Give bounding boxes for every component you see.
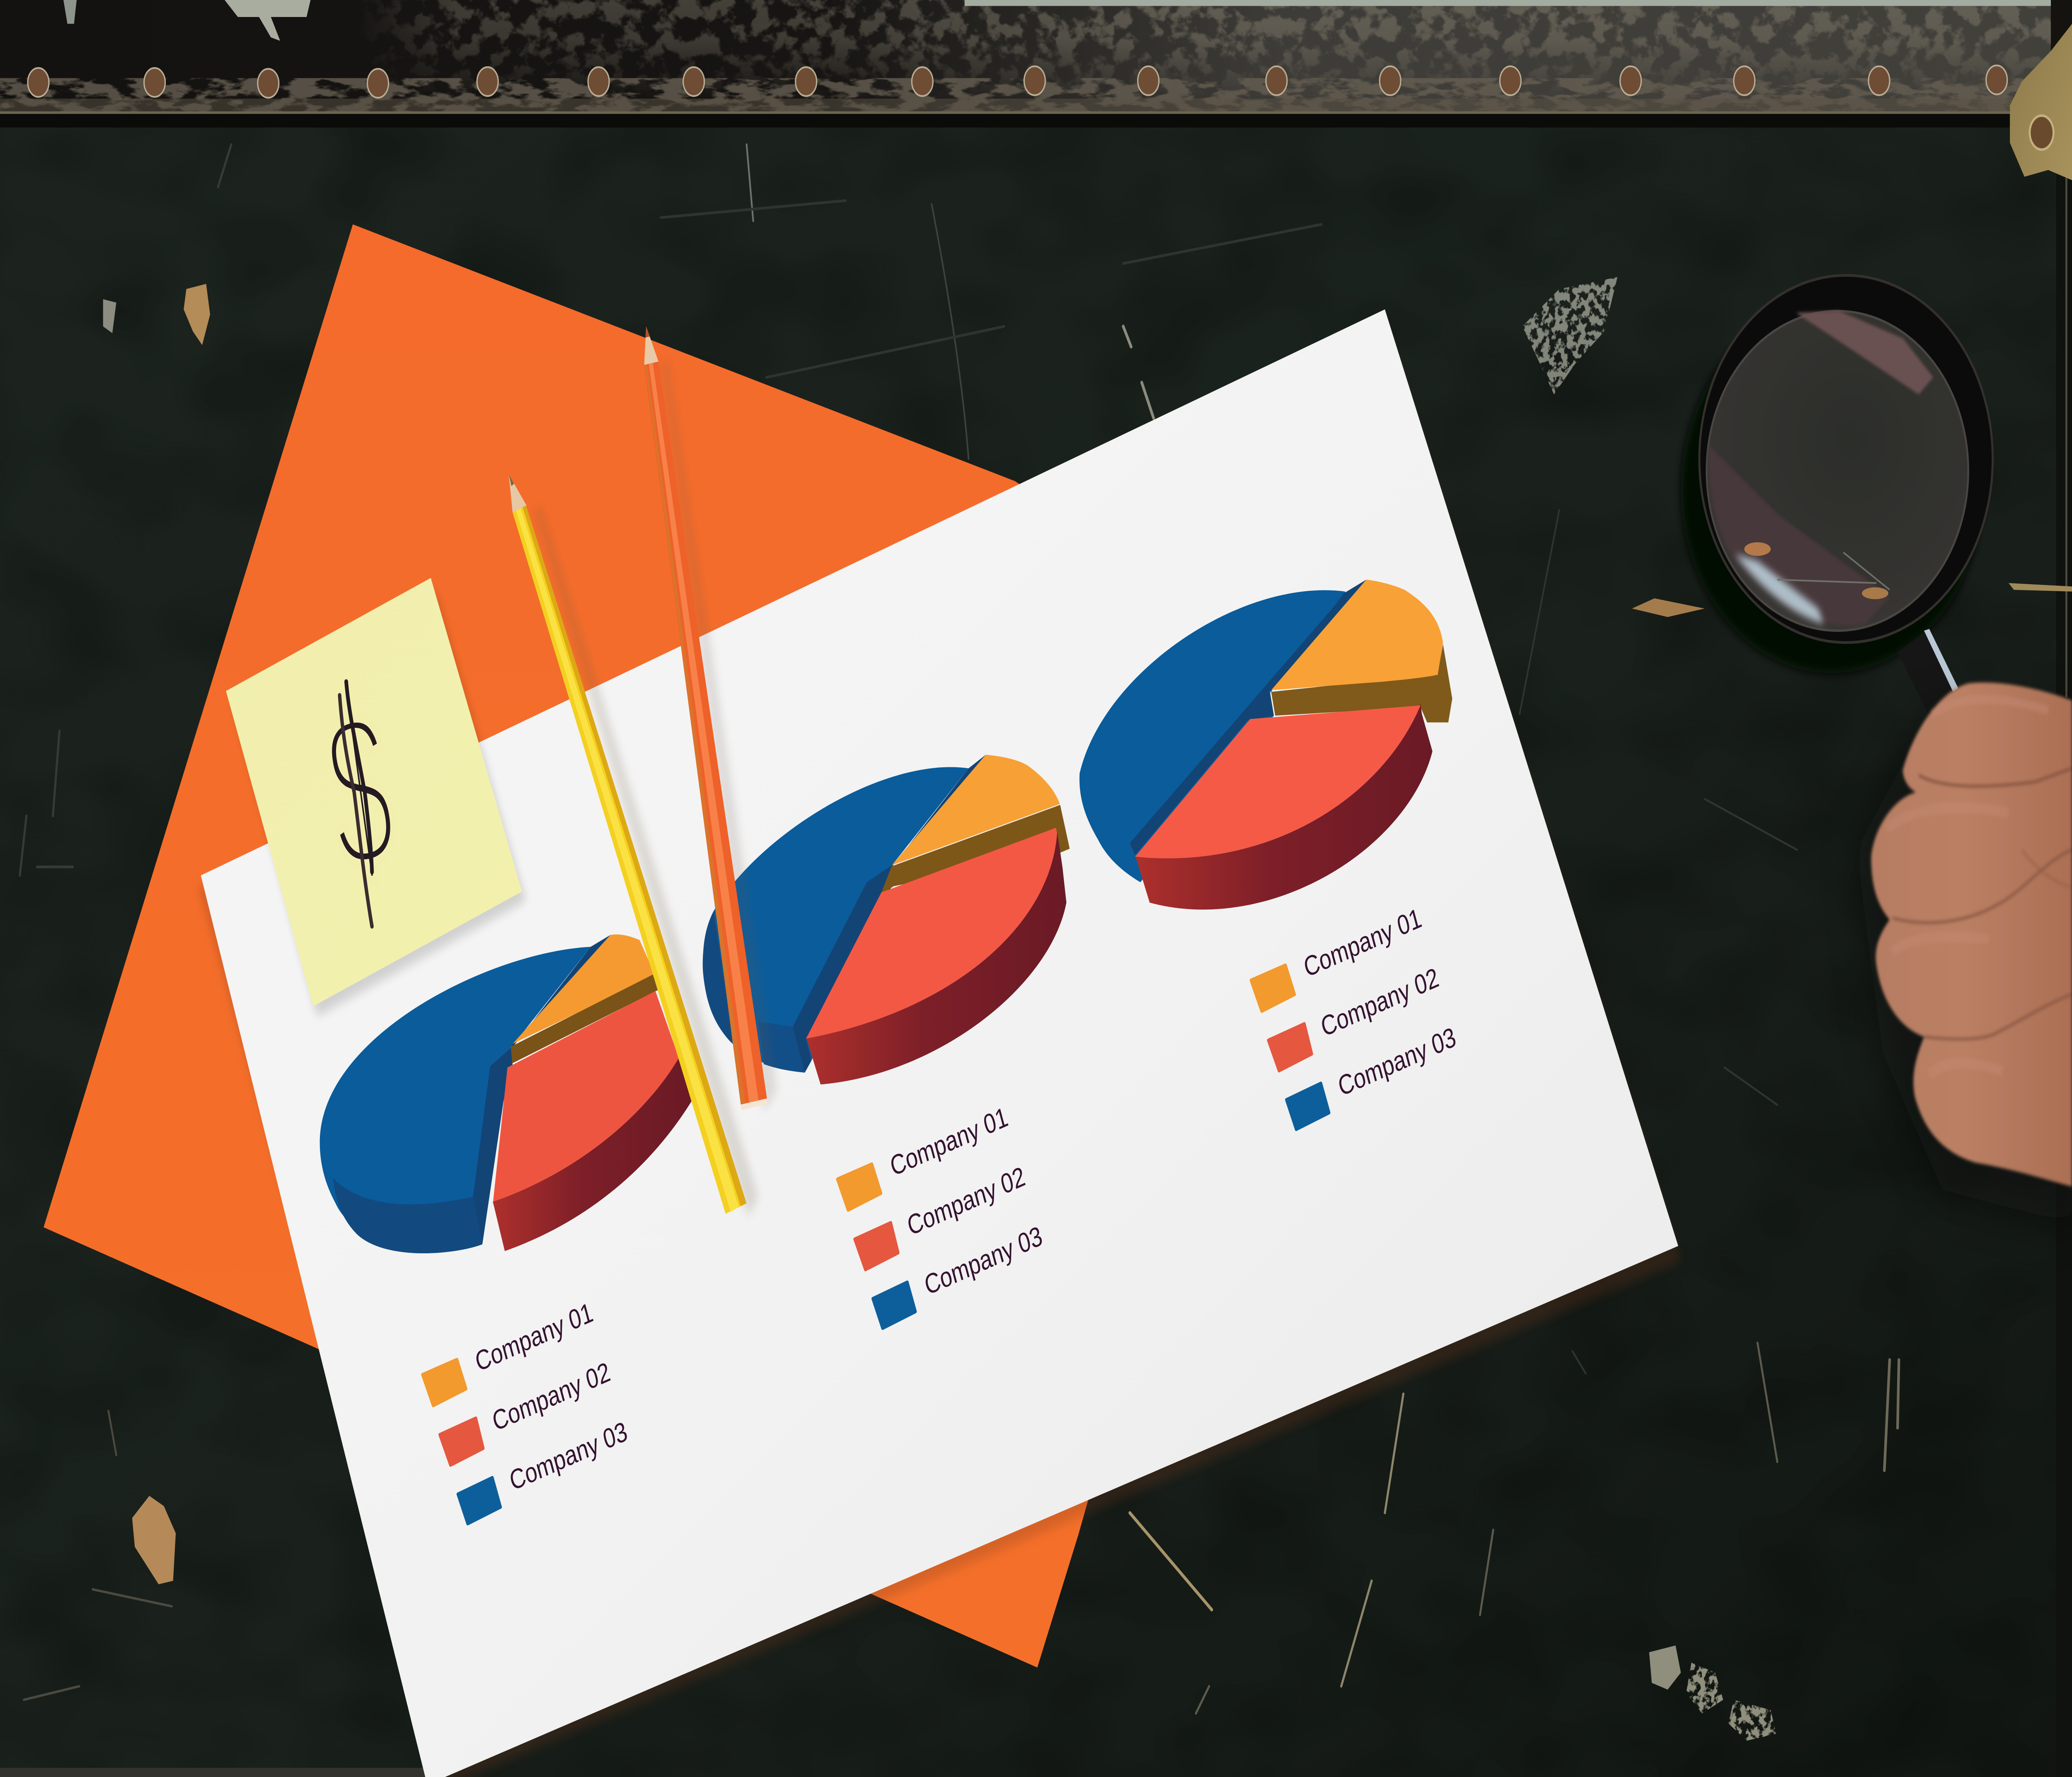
handwritten dollar sign: $: [314, 662, 406, 919]
orange folder: [44, 225, 1322, 1668]
frame: [1699, 276, 1993, 643]
swatch: company 01: [422, 1359, 466, 1406]
legend 1: Company 03: [506, 1415, 630, 1497]
metal band with rivets: [0, 0, 2072, 128]
legend 3: [1251, 902, 1459, 1129]
sticky note: [226, 578, 526, 1016]
orange pencil: [644, 326, 767, 1110]
legend 3: Company 03: [1335, 1021, 1459, 1102]
legend 2: [838, 1101, 1046, 1328]
hand: [1857, 682, 2072, 1224]
magnifying glass: [1681, 276, 1993, 721]
swatch: company 01: [1251, 965, 1295, 1011]
yellow pencil: [509, 474, 746, 1214]
orange pencil shadow: [661, 360, 777, 1112]
hand shadow: [1857, 714, 2072, 1224]
pie chart 1: [320, 934, 692, 1253]
legend 2: Company 03: [921, 1220, 1046, 1301]
lens: [1706, 311, 1968, 631]
pie chart 3: [1080, 580, 1452, 909]
legend 3: Company 02: [1318, 961, 1442, 1042]
swatch: company 01: [838, 1164, 881, 1210]
legend 1: Company 01: [472, 1296, 596, 1378]
white chart paper: [201, 309, 1678, 1777]
paper shadow: [198, 323, 1681, 1777]
pie chart 2: [703, 755, 1069, 1085]
cast shadow: [1681, 306, 1982, 673]
rivets: [28, 65, 2007, 98]
handle: [1898, 629, 1958, 721]
yellow pencil shadow: [534, 507, 758, 1217]
legend 1: Company 02: [489, 1356, 613, 1437]
legend 2: Company 01: [887, 1101, 1011, 1182]
legend 2: Company 02: [904, 1160, 1028, 1241]
fingers and back of hand: [1871, 682, 2072, 1187]
legend 1: [422, 1296, 630, 1524]
brass corner fitting: [2010, 24, 2072, 180]
legend 3: Company 01: [1300, 902, 1425, 983]
